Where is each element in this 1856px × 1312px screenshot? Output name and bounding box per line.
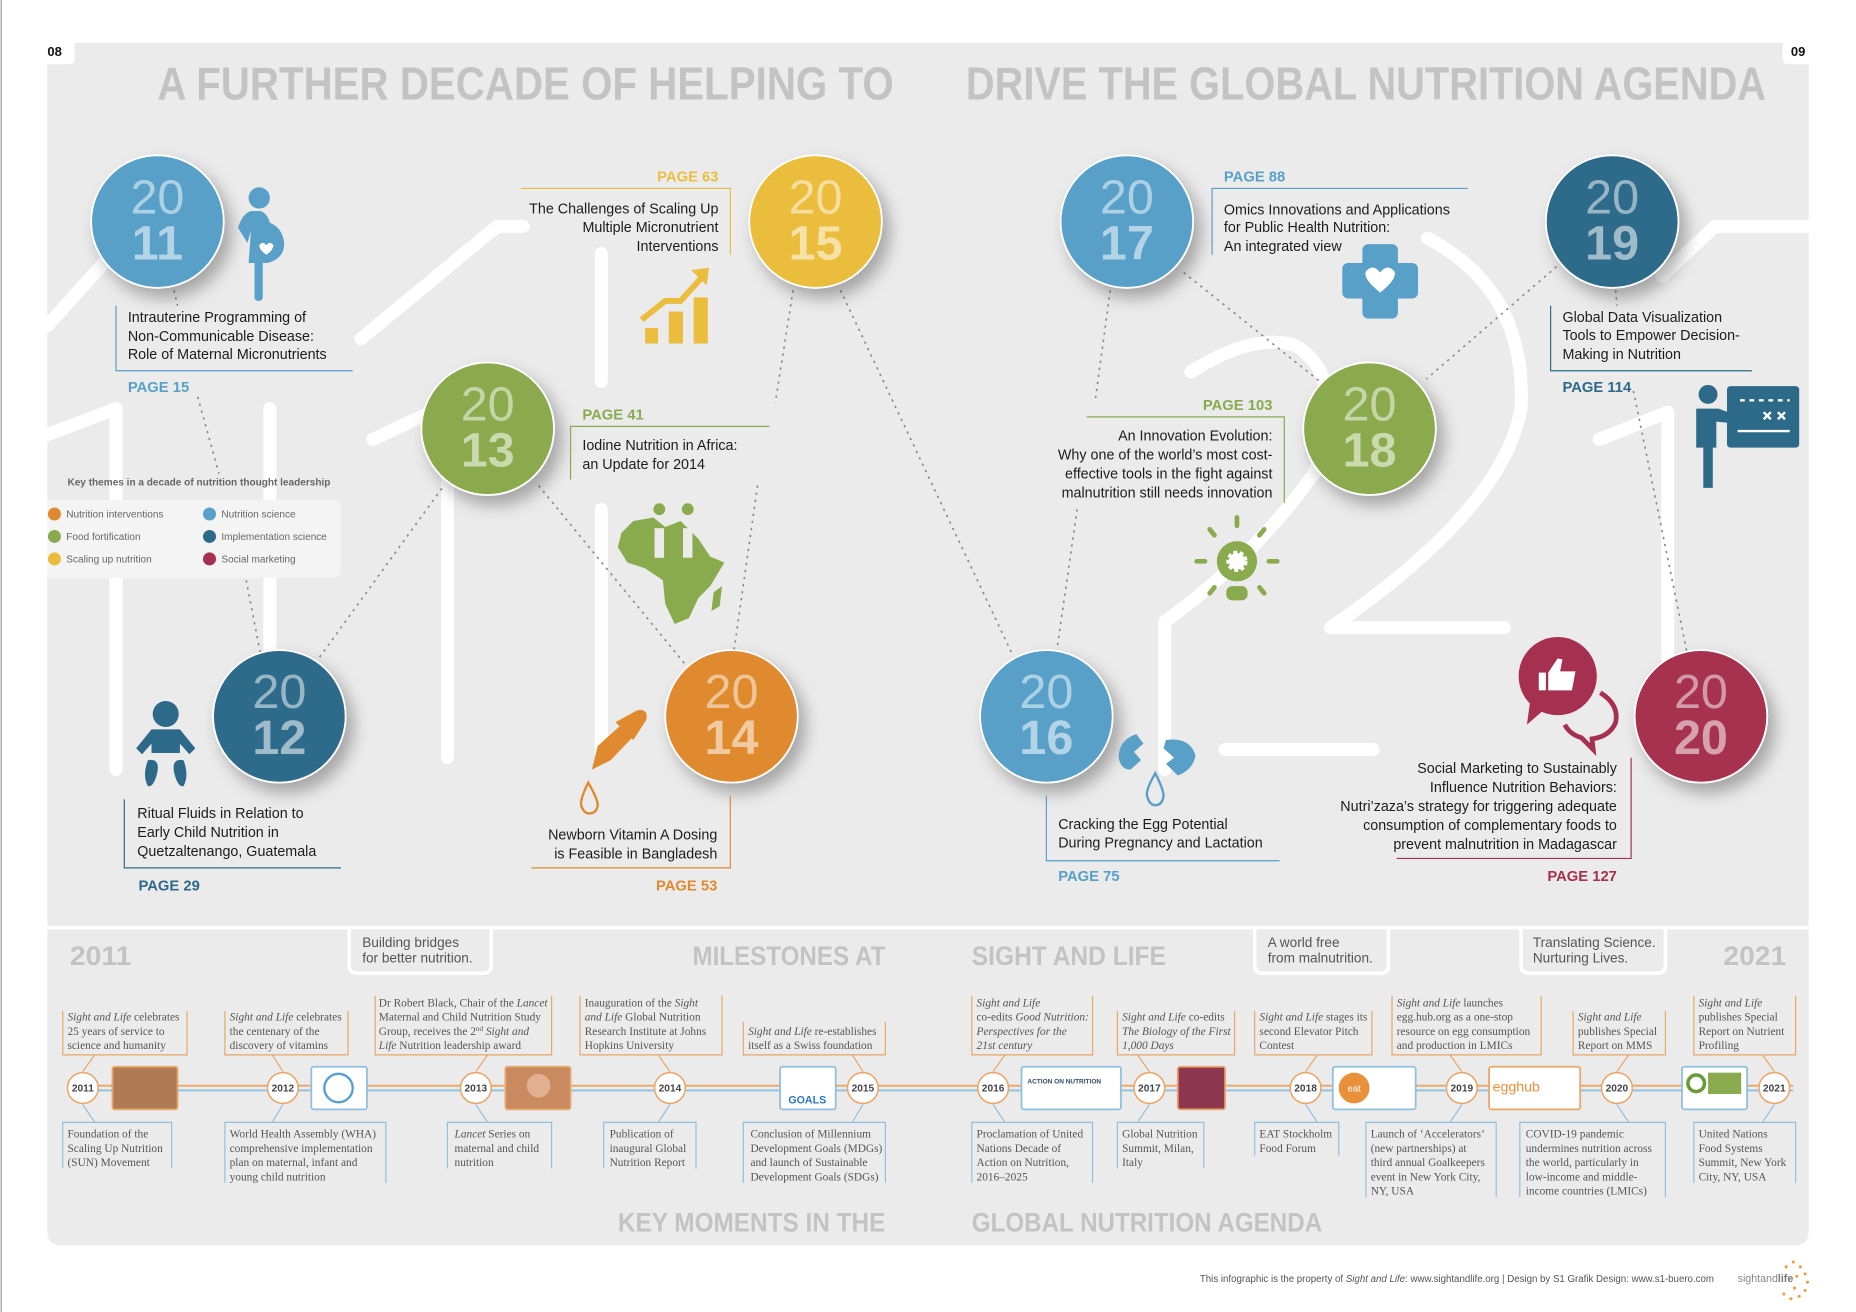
page number 09	[1783, 36, 1816, 64]
images	[112, 1067, 1747, 1109]
icon: medical cross heart	[1342, 244, 1418, 319]
callout texts: COVID-19 pandemic	[1526, 1129, 1624, 1141]
text block 2020: consumption of complementary foods to	[1363, 818, 1617, 834]
text block 2016: Cracking the Egg Potential	[1058, 817, 1228, 833]
callout texts: young child nutrition	[230, 1171, 326, 1183]
callout texts: inaugural Global	[610, 1143, 686, 1155]
text block 2017	[1212, 169, 1468, 255]
callout texts: NY, USA	[1371, 1186, 1415, 1198]
callout texts: event in New York City,	[1371, 1171, 1481, 1183]
callout texts: and launch of Sustainable	[750, 1157, 867, 1169]
milestones headings: SIGHT AND LIFE	[972, 940, 1166, 971]
legend: Implementation science	[221, 532, 327, 543]
circle 2019: 20	[1585, 170, 1639, 224]
callout texts: and production in LMICs	[1397, 1040, 1513, 1052]
callout texts: Development Goals (SDGs)	[750, 1171, 879, 1183]
text block 2015: PAGE 63	[657, 169, 718, 185]
circle 2020: 20	[1674, 711, 1728, 765]
icon: teacher at board	[1696, 385, 1799, 488]
callout texts: Launch of ‘Accelerators’	[1371, 1129, 1485, 1141]
callout texts: maternal and child	[455, 1143, 539, 1155]
callout texts: Development Goals (MDGs)	[750, 1143, 883, 1155]
circle 2018: 18	[1343, 424, 1396, 478]
circle 2016	[980, 650, 1113, 783]
icon: dropper	[581, 710, 647, 813]
callout texts: Life Nutrition leadership award	[378, 1040, 521, 1052]
text block 2013: an Update for 2014	[582, 457, 705, 473]
callout texts: Italy	[1122, 1157, 1143, 1169]
callout texts: Sight and Life launches	[1397, 997, 1504, 1009]
callout texts: Foundation of the	[67, 1129, 148, 1141]
callout texts: Action on Nutrition,	[977, 1157, 1069, 1169]
callout texts: publishes Special	[1699, 1012, 1778, 1024]
callout texts: Sight and Life re-establishes	[748, 1026, 877, 1038]
text block 2011: Intrauterine Programming of	[128, 310, 306, 326]
callout texts: Sight and Life celebrates	[230, 1012, 342, 1024]
title	[157, 58, 1766, 110]
text block 2013: PAGE 41	[582, 407, 644, 423]
callout texts: Contest	[1259, 1040, 1295, 1052]
callout texts: Group, receives the 2	[379, 1026, 476, 1038]
text block 2011: PAGE 15	[128, 380, 189, 396]
icon: pregnant woman	[238, 187, 284, 301]
callout texts: World Health Assembly (WHA)	[230, 1129, 376, 1141]
circle 2020: 20	[1674, 665, 1728, 719]
callout texts: science and humanity	[67, 1040, 166, 1052]
text block 2018: An Innovation Evolution:	[1118, 429, 1272, 445]
callout texts: Summit, New York	[1699, 1157, 1787, 1169]
text block 2014: Newborn Vitamin A Dosing	[548, 827, 717, 843]
callout texts: (new partnerships) at	[1371, 1143, 1467, 1155]
callout texts: Sight and Life stages its	[1259, 1012, 1368, 1024]
callout texts: and Life Global Nutrition	[585, 1012, 701, 1024]
callout texts: Report on Nutrient	[1699, 1026, 1785, 1038]
text block 2019: PAGE 114	[1562, 380, 1632, 396]
circle 2014	[665, 650, 798, 783]
text block 2020: prevent malnutrition in Madagascar	[1393, 837, 1617, 853]
callout texts: comprehensive implementation	[230, 1143, 373, 1155]
callout texts: Proclamation of United	[977, 1129, 1083, 1141]
text block 2015: Interventions	[637, 239, 718, 255]
circle 2019: 19	[1585, 216, 1639, 270]
circle 2016: 16	[1019, 711, 1073, 765]
text block 2012: Ritual Fluids in Relation to	[137, 806, 304, 822]
text block 2019: Making in Nutrition	[1562, 347, 1681, 363]
tagline tabs: Building bridges	[362, 935, 459, 950]
circle 2017	[1061, 155, 1193, 288]
callout texts: low-income and middle-	[1526, 1171, 1638, 1183]
callout texts: resource on egg consumption	[1397, 1026, 1530, 1038]
text block 2015: Multiple Micronutrient	[582, 220, 718, 236]
text block 2019: Tools to Empower Decision-	[1562, 328, 1740, 344]
tagline tabs: Translating Science.	[1533, 935, 1656, 950]
text block 2017: PAGE 88	[1224, 169, 1285, 185]
images: GOALS	[788, 1094, 826, 1106]
year nodes: 2015	[852, 1084, 875, 1095]
text block 2011	[116, 306, 353, 396]
icon: lightbulb gear	[1197, 518, 1277, 600]
circle 2012	[213, 650, 346, 783]
callout texts: Food Forum	[1259, 1143, 1316, 1155]
text block 2012: Early Child Nutrition in	[137, 825, 279, 841]
top callouts	[63, 996, 1796, 1071]
page number 08: 08	[47, 44, 62, 59]
callout texts: itself as a Swiss foundation	[748, 1040, 873, 1052]
milestones headings: 2021	[1723, 940, 1786, 971]
year nodes: 2021	[1763, 1084, 1786, 1095]
callout texts: plan on maternal, infant and	[230, 1157, 358, 1169]
legend: Key themes in a decade of nutrition thought leadership	[67, 478, 330, 489]
callout texts: Maternal and Child Nutrition Study	[379, 1012, 541, 1024]
logo: sightandlife	[1738, 1273, 1793, 1285]
title: A FURTHER DECADE OF HELPING TO	[157, 58, 894, 110]
callout texts: Sight and Life co-edits	[1122, 1012, 1225, 1024]
year nodes	[67, 1073, 1790, 1103]
callout texts: Sight and Life celebrates	[67, 1012, 180, 1024]
callout texts: Nations Decade of	[977, 1143, 1061, 1155]
callout texts: nd	[476, 1025, 483, 1033]
text block 2018: effective tools in the fight against	[1065, 466, 1272, 482]
callout texts: Publication of	[610, 1129, 674, 1141]
callout texts: (SUN) Movement	[67, 1157, 151, 1169]
text block 2019: Global Data Visualization	[1562, 310, 1722, 326]
text block 2016	[1046, 796, 1280, 885]
text block 2020	[1340, 758, 1631, 885]
milestones headings: GLOBAL NUTRITION AGENDA	[972, 1206, 1322, 1237]
callout texts: nutrition	[455, 1157, 494, 1169]
circle 2015: 15	[789, 216, 843, 270]
legend: Food fortification	[66, 532, 141, 543]
callout texts: Perspectives for the	[976, 1026, 1067, 1038]
text block 2012	[124, 799, 341, 894]
year nodes: 2014	[659, 1084, 682, 1095]
callout texts: Conclusion of Millennium	[750, 1129, 871, 1141]
text block 2014: is Feasible in Bangladesh	[554, 846, 717, 862]
images: ACTION ON NUTRITION	[1027, 1078, 1101, 1085]
year nodes: 2011	[72, 1084, 94, 1095]
timeline	[63, 996, 1796, 1198]
milestones headings: 2011	[70, 940, 131, 971]
icon: growth chart	[642, 268, 709, 344]
circle 2020	[1635, 650, 1767, 783]
circle 2011	[91, 155, 224, 288]
tagline tabs: A world free	[1268, 935, 1340, 950]
text block 2017: for Public Health Nutrition:	[1224, 220, 1390, 236]
callout texts: 21st century	[977, 1040, 1033, 1052]
callout texts: Summit, Milan,	[1122, 1143, 1194, 1155]
text block 2020: Social Marketing to Sustainably	[1417, 761, 1618, 777]
circle 2016: 20	[1019, 665, 1073, 719]
tagline tabs: for better nutrition.	[362, 951, 473, 966]
text block 2011: Non-Communicable Disease:	[128, 329, 314, 345]
images: egghub	[1493, 1080, 1540, 1096]
callout texts: Research Institute at Johns	[585, 1026, 707, 1038]
tagline tabs	[349, 929, 1665, 973]
callout texts: undermines nutrition across	[1526, 1143, 1653, 1155]
text block 2013	[571, 407, 769, 480]
text block 2012: PAGE 29	[138, 878, 200, 894]
text block 2020: Nutri’zaza’s strategy for triggering adequate	[1340, 799, 1617, 815]
text block 2012: Quetzaltenango, Guatemala	[137, 844, 316, 860]
callout texts: third annual Goalkeepers	[1371, 1157, 1485, 1169]
year nodes: 2017	[1138, 1084, 1161, 1095]
text block 2018: Why one of the world’s most cost-	[1058, 448, 1273, 464]
circle 2014: 14	[705, 711, 759, 765]
circle 2012: 20	[252, 665, 306, 719]
callout texts: Hopkins University	[585, 1040, 674, 1052]
callout texts	[67, 997, 1787, 1198]
circle 2012: 12	[252, 711, 306, 765]
text block 2017: Omics Innovations and Applications	[1224, 202, 1450, 218]
circle 2011: 20	[130, 170, 184, 224]
callout texts: Sight and	[483, 1026, 529, 1038]
circle 2018	[1303, 362, 1436, 495]
callout texts: United Nations	[1699, 1129, 1768, 1141]
circle 2013: 20	[461, 377, 515, 431]
legend: Nutrition science	[221, 510, 296, 521]
callout texts: Sight and Life	[1578, 1012, 1642, 1024]
circle 2014: 20	[705, 665, 758, 719]
circle 2017: 20	[1100, 170, 1154, 224]
circle 2013	[421, 362, 554, 495]
text block 2017: An integrated view	[1224, 239, 1342, 255]
circle 2013: 13	[461, 424, 515, 478]
icon: baby	[136, 701, 195, 786]
bottom callouts	[63, 1105, 1796, 1197]
milestones headings: MILESTONES AT	[692, 940, 886, 971]
legend: Social marketing	[221, 554, 296, 565]
page number 09: 09	[1791, 44, 1805, 59]
year nodes: 2018	[1294, 1084, 1317, 1095]
text block 2016: PAGE 75	[1058, 869, 1120, 885]
text block 2015	[521, 169, 730, 255]
text block 2016: During Pregnancy and Lactation	[1058, 836, 1263, 852]
images: eat	[1348, 1084, 1361, 1095]
callout texts: City, NY, USA	[1699, 1171, 1767, 1183]
callout texts: EAT Stockholm	[1259, 1129, 1332, 1141]
year nodes: 2016	[982, 1084, 1005, 1095]
year nodes: 2020	[1606, 1084, 1629, 1095]
legend: Nutrition interventions	[66, 510, 163, 521]
callout texts: the world, particularly in	[1526, 1157, 1639, 1169]
callout texts: co-edits Good Nutrition:	[977, 1012, 1089, 1024]
callout texts: Lancet Series on	[454, 1129, 531, 1141]
icon: broken egg	[1119, 734, 1196, 805]
callout texts: Food Systems	[1699, 1143, 1763, 1155]
year nodes: 2013	[465, 1084, 487, 1095]
logo	[1738, 1261, 1809, 1300]
circle 2018: 20	[1343, 377, 1396, 431]
callout texts: 1,000 Days	[1122, 1040, 1174, 1052]
legend: Scaling up nutrition	[66, 554, 152, 565]
callout texts: 25 years of service to	[67, 1026, 165, 1038]
circle 2011: 11	[132, 216, 183, 270]
icon: thumbs up speech bubbles	[1519, 637, 1616, 750]
callout texts: publishes Special	[1578, 1026, 1657, 1038]
text block 2018	[1058, 398, 1284, 503]
year nodes: 2012	[272, 1084, 295, 1095]
callout texts: Global Nutrition	[1122, 1129, 1198, 1141]
text block 2014: PAGE 53	[656, 878, 717, 894]
text block 2018: malnutrition still needs innovation	[1062, 485, 1272, 501]
text block 2020: PAGE 127	[1547, 869, 1617, 885]
legend	[47, 478, 341, 578]
text block 2019	[1551, 306, 1752, 396]
text block 2018: PAGE 103	[1203, 398, 1272, 414]
text block 2013: Iodine Nutrition in Africa:	[582, 438, 738, 454]
callout texts: Sight and Life	[1699, 997, 1762, 1009]
year nodes: 2019	[1451, 1084, 1473, 1095]
circle 2019	[1546, 155, 1678, 288]
callout texts: the centenary of the	[230, 1026, 320, 1038]
tagline tabs: Nurturing Lives.	[1533, 951, 1628, 966]
callout texts: Dr Robert Black, Chair of the Lancet	[379, 997, 548, 1009]
callout texts: 2016–2025	[977, 1171, 1028, 1183]
text block 2015: The Challenges of Scaling Up	[529, 201, 719, 217]
callout texts: discovery of vitamins	[230, 1040, 329, 1052]
text block 2020: Influence Nutrition Behaviors:	[1430, 780, 1617, 796]
footer: This infographic is the property of Sight and Life: www.sightandlife.org | Design by S1 Grafik Design: www.s1-buero.com	[1200, 1274, 1714, 1285]
circle 2015: 20	[789, 170, 843, 224]
callout texts: second Elevator Pitch	[1259, 1026, 1359, 1038]
callout texts: income countries (LMICs)	[1526, 1186, 1647, 1198]
callout texts: Inauguration of the Sight	[585, 997, 699, 1009]
circle 2015	[749, 155, 882, 288]
tagline tabs: from malnutrition.	[1268, 951, 1373, 966]
circle 2017: 17	[1100, 216, 1154, 270]
callout texts: Scaling Up Nutrition	[67, 1143, 163, 1155]
text block 2014	[531, 796, 730, 894]
icon: Africa	[618, 503, 724, 624]
callout texts: The Biology of the First	[1122, 1026, 1232, 1038]
milestones headings	[70, 940, 1786, 1237]
callout texts: egg.hub.org as a one-stop	[1397, 1012, 1513, 1024]
text block 2011: Role of Maternal Micronutrients	[128, 347, 327, 363]
callout texts: Profiling	[1699, 1040, 1739, 1052]
callout texts: Report on MMS	[1578, 1040, 1652, 1052]
callout texts: Nutrition Report	[610, 1157, 686, 1169]
page number 08	[43, 36, 75, 64]
milestones headings: KEY MOMENTS IN THE	[618, 1206, 885, 1237]
callout texts: Sight and Life	[977, 997, 1040, 1009]
